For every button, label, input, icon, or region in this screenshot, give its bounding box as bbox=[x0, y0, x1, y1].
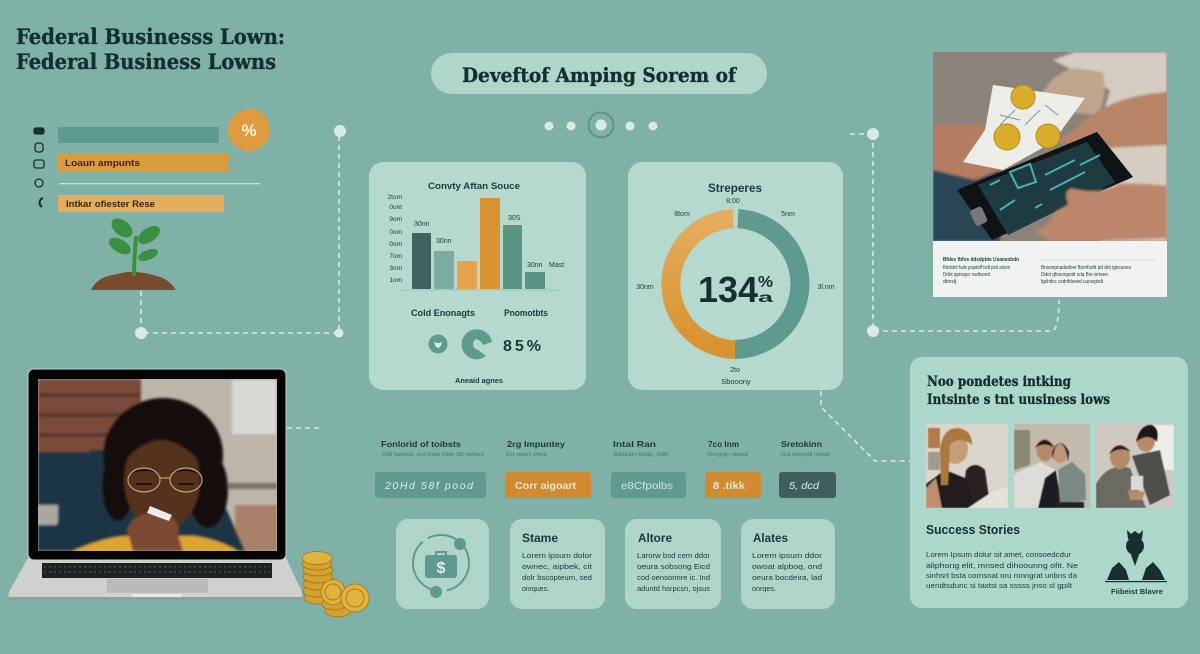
shirt bbox=[1053, 52, 1167, 241]
bar chart: 30nn bbox=[414, 221, 430, 228]
stat 1: 20Hd 58f pood bbox=[384, 480, 474, 492]
panel: Altore card: aduntd hsrpcsn, ojsus bbox=[637, 584, 710, 593]
panel: Stame card bbox=[510, 519, 605, 609]
laptop screen bbox=[28, 369, 286, 560]
panel: bar chart card: Aneaid agnes bbox=[455, 376, 503, 385]
bar: blank bbox=[58, 127, 219, 143]
panel: Stame card: Stame bbox=[522, 533, 558, 545]
stat row bbox=[375, 439, 836, 498]
panel: Stame card: Lorem ipsum dolor bbox=[522, 551, 593, 560]
stat 4: 7co Inm bbox=[708, 439, 739, 449]
donut labels: 5nm bbox=[781, 211, 795, 218]
donut labels: 3l.nm bbox=[817, 284, 835, 291]
icon: percent badge bbox=[228, 109, 270, 151]
icon: plant sprout bbox=[91, 215, 176, 290]
bar chart: 0ont bbox=[389, 204, 402, 211]
icon: briefcase with dollar sign: $ bbox=[437, 560, 446, 577]
paper bbox=[963, 85, 1085, 170]
caption text: fgshdsc ssdnfdsoed uunsqtsdt bbox=[1041, 279, 1103, 285]
chart title: Streperes bbox=[708, 181, 762, 195]
stat 5: 5, dcd bbox=[789, 481, 819, 492]
body text bbox=[926, 550, 1078, 590]
panel: Stame card: ownec, aipbek, cit bbox=[522, 562, 592, 571]
bar chart: 7om bbox=[389, 253, 402, 260]
heading pill: Deveftof Amping Sorem of bbox=[462, 63, 737, 87]
coins bbox=[1011, 85, 1035, 109]
bottom hand bbox=[1035, 184, 1167, 241]
bar chart: 0om bbox=[389, 229, 402, 236]
bar: interest rates bbox=[58, 195, 224, 212]
caption text: Bnsonpnadsdoer fbonfudd pd dot ignsuoes bbox=[1041, 265, 1131, 271]
donut labels: 30nm bbox=[636, 284, 654, 291]
panel: loan bars bbox=[34, 109, 270, 212]
title bbox=[16, 24, 285, 74]
panel: Altore card: cod oensonnre ic. Ind bbox=[637, 573, 710, 582]
panel: briefcase icon card bbox=[396, 519, 489, 609]
panel: Altore card: Larorw bsd cem ddor bbox=[637, 551, 711, 560]
panel: Alates card bbox=[741, 519, 835, 609]
bar: loan amounts bbox=[58, 154, 230, 172]
title: Federal Business Lowns bbox=[16, 49, 276, 74]
donut labels: 8tom bbox=[674, 211, 690, 218]
bar chart: 3om bbox=[389, 265, 402, 272]
panel: Stame card: onrques. bbox=[522, 584, 549, 593]
laptop base bbox=[9, 558, 302, 600]
bar chart bbox=[388, 194, 564, 290]
caption text: Bfdes fbfos ddsdpbts Usansobdn bbox=[943, 257, 1019, 263]
donut labels: 2to bbox=[730, 367, 740, 374]
stat 3: Intal Ran bbox=[613, 439, 656, 449]
caption text: Ddot qfnsonpoid sdq Bw iortoen bbox=[1041, 272, 1108, 278]
body text: uendtsdunc si taxtsi sa sssss jnso sl gpilt bbox=[926, 581, 1073, 590]
heading: Noo pondetes intking bbox=[927, 374, 1071, 390]
panel: success stories bbox=[910, 357, 1188, 608]
arm bbox=[1043, 68, 1105, 115]
stat 5: Grd ahspirdt nsrbdt bbox=[781, 452, 830, 458]
donut centre value: 134 bbox=[698, 269, 758, 310]
stat 5: Sretokinn bbox=[781, 439, 822, 449]
donut centre value: a bbox=[758, 289, 773, 305]
bar chart: 9om bbox=[389, 216, 402, 223]
laptop with video call photo bbox=[9, 369, 302, 600]
bar chart: 30S bbox=[508, 215, 521, 222]
stat: 85%: 85% bbox=[503, 338, 541, 355]
icon caption: Fiibeist Blavre bbox=[1111, 587, 1163, 596]
panel: Alates card: Lorem ipsum ddor bbox=[752, 551, 823, 560]
bar chart: Mast bbox=[549, 262, 564, 269]
caption text: Bndotid fuds pspdoff lsdt psd atuon bbox=[943, 265, 1010, 271]
icon: percent badge: % bbox=[241, 121, 257, 140]
bar chart: 0om bbox=[389, 241, 402, 248]
stat 3: e8Cfpolbs bbox=[621, 481, 673, 492]
heading bbox=[927, 374, 1110, 408]
sub-labels: Cold Enonagts bbox=[411, 308, 475, 319]
panel: Stame card: dolr bscopteum, sed bbox=[522, 573, 592, 582]
bar chart: 30nn bbox=[527, 262, 543, 269]
left hand bbox=[933, 125, 1012, 180]
stat 4: Oergqin nisisd bbox=[707, 452, 748, 458]
panel: Altore card: oeura sobsong Eicd bbox=[637, 562, 710, 571]
donut chart bbox=[671, 219, 800, 350]
caption text: dtordj bbox=[943, 279, 956, 285]
body text: aliphong elit, mnsed dihoounng ofit. Ne bbox=[926, 561, 1078, 570]
stat 2: Corr aigoart bbox=[515, 481, 577, 492]
subheading: Success Stories bbox=[926, 523, 1020, 537]
stat 1: Glifi fastned, qvd bstis foltei SE nsrfors bbox=[382, 452, 484, 458]
bar chart: 2tom bbox=[388, 194, 402, 201]
panel: Alates card: Alates bbox=[753, 533, 788, 545]
shirt bbox=[72, 536, 238, 551]
panel: bar chart card bbox=[369, 162, 586, 390]
hair bbox=[102, 396, 225, 467]
panel: Alates card: owoat alpboq, ond bbox=[752, 562, 822, 571]
panel: Alates card: oeura bocdeira, lad bbox=[752, 573, 822, 582]
stat 2: Ert nsert pfeis bbox=[506, 452, 547, 458]
donut labels: 8:00 bbox=[726, 198, 740, 205]
bar chart: 1om bbox=[389, 277, 402, 284]
panel: donut chart card bbox=[628, 162, 843, 390]
phone bbox=[957, 132, 1133, 240]
panel: Altore card bbox=[625, 519, 721, 609]
trousers bbox=[933, 170, 1000, 241]
icon: small badge bbox=[428, 334, 448, 354]
body text: Lorem Ipsum dolur sit amet, consoedcdur bbox=[926, 550, 1072, 559]
icon: mountains and pin bbox=[1105, 530, 1167, 582]
heading: Intsinte s tnt uusiness lows bbox=[927, 392, 1110, 408]
panel: Altore card: Altore bbox=[638, 533, 672, 545]
stat 2 bbox=[505, 439, 591, 498]
stat 4 bbox=[705, 439, 761, 498]
photo: two men with phone bbox=[1096, 424, 1174, 508]
photo: woman bbox=[38, 379, 277, 551]
face bbox=[124, 430, 200, 530]
stat 3: Sdsbsin fsdig. Glifi bbox=[613, 452, 668, 458]
bar: loan amounts: Loaun ampunts bbox=[65, 158, 140, 169]
navigation dots bbox=[544, 112, 658, 138]
title: Federal Businesss Lown: bbox=[16, 24, 285, 49]
heading pill bbox=[431, 53, 767, 94]
stat 2: 2rg Impuntey bbox=[507, 439, 565, 449]
donut labels bbox=[636, 198, 835, 386]
body text: sinhsrt bsta cornsnat oru ronngrat unbns da bbox=[926, 571, 1078, 580]
photo: couple with phone bbox=[1014, 424, 1090, 508]
stat 4: 8 .tikk bbox=[713, 481, 745, 492]
photo card: hands with phone bbox=[933, 52, 1167, 297]
donut centre value: % bbox=[758, 274, 773, 291]
stat 3 bbox=[611, 439, 686, 498]
connector lines: right bbox=[821, 128, 1059, 461]
pie gauge bbox=[462, 329, 492, 359]
top right hand bbox=[1055, 92, 1167, 148]
caption text bbox=[943, 257, 1131, 285]
bar chart: 30nn bbox=[436, 238, 452, 245]
connector lines: left bbox=[135, 125, 346, 428]
photo bbox=[933, 52, 1167, 241]
stat 1 bbox=[375, 439, 486, 498]
stat 1: Fonlorid of toibsts bbox=[381, 439, 461, 449]
donut labels: Sbooony bbox=[721, 377, 751, 386]
panel: Alates card: onrqes. bbox=[752, 584, 776, 593]
panel: bar chart card: Pnomotbts bbox=[504, 308, 548, 319]
bar: interest rates: Intkar ofiester Rese bbox=[66, 199, 155, 210]
photo: woman smiling bbox=[926, 424, 1008, 508]
caption text: Ddot qpnsqsr nsdtsond bbox=[943, 272, 990, 278]
icon: coin stack bbox=[302, 552, 369, 617]
icon column bbox=[34, 128, 44, 207]
chart title: Convty Aftan Souce bbox=[428, 181, 520, 192]
hand bbox=[127, 513, 183, 551]
stat 5 bbox=[779, 439, 836, 498]
